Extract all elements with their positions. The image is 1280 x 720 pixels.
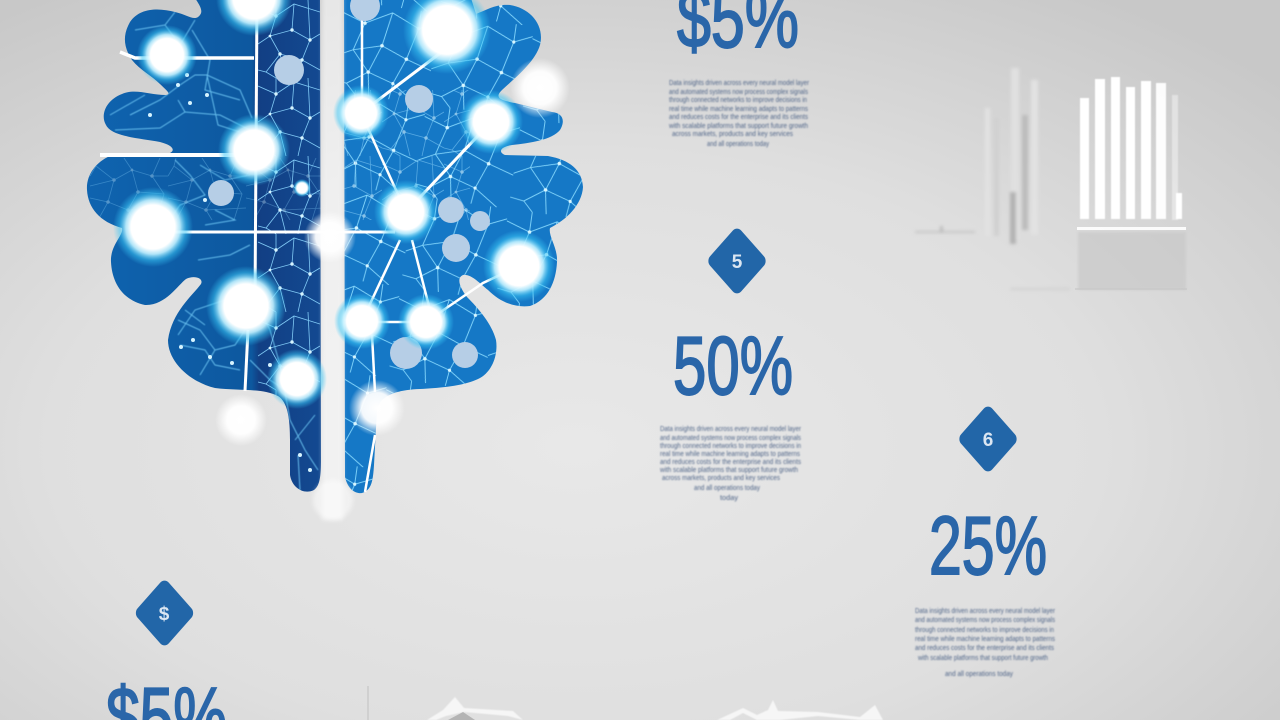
paragraph: and automated systems now process complex signals — [669, 89, 808, 96]
paragraph: across markets, products and key services — [672, 131, 793, 138]
paragraph — [659, 426, 802, 502]
reflection panel — [1078, 232, 1186, 290]
paragraph: with scalable platforms that support future growth — [659, 467, 798, 474]
paragraph: and all operations today — [707, 141, 769, 148]
big number: 25% — [929, 499, 1047, 592]
bars — [1080, 77, 1182, 220]
bar chart: faint ghost bars — [915, 68, 1070, 290]
paragraph: with scalable platforms that support future growth — [917, 655, 1048, 662]
paragraph: and reduces costs for the enterprise and its clients — [915, 645, 1054, 652]
paragraph: real time while machine learning adapts to patterns — [669, 106, 808, 113]
paragraph: real time while machine learning adapts to patterns — [915, 636, 1055, 643]
white mountain left — [427, 697, 523, 720]
right hemisphere — [340, 0, 590, 500]
paragraph: today — [720, 495, 739, 502]
paragraph: across markets, products and key services — [662, 475, 780, 482]
paragraph — [915, 608, 1056, 678]
white mountain right — [717, 700, 883, 720]
glowing nodes — [113, 0, 570, 520]
paragraph: through connected networks to improve decisions in — [669, 97, 807, 104]
big number: 50% — [673, 319, 793, 412]
centre glow strip — [322, 0, 343, 520]
paragraph: and automated systems now process complex signals — [915, 617, 1055, 624]
paragraph — [668, 80, 810, 148]
paragraph: Data insights driven across every neural model layer — [915, 608, 1056, 615]
paragraph: real time while machine learning adapts to patterns — [660, 451, 800, 458]
connector lines — [100, 0, 519, 492]
diamond icon: 6 — [983, 430, 993, 451]
diamond icon: 5 — [732, 252, 743, 273]
paragraph: through connected networks to improve decisions in — [915, 627, 1054, 634]
baseline — [1077, 227, 1186, 230]
brain illustration — [80, 0, 590, 520]
paragraph: and automated systems now process complex signals — [660, 435, 801, 442]
paragraph: and all operations today — [694, 485, 760, 492]
stat block: bottom left — [106, 578, 227, 720]
bottom chart fragments — [367, 686, 883, 720]
grey peak — [448, 712, 475, 720]
axis line — [367, 686, 369, 720]
paragraph: with scalable platforms that support future growth — [668, 123, 808, 130]
left hemisphere — [86, 0, 321, 492]
stat block: right — [915, 404, 1056, 678]
diamond icon: $ — [159, 604, 170, 625]
paragraph: and reduces costs for the enterprise and its clients — [669, 114, 808, 121]
axis ticks row — [1075, 288, 1187, 290]
diamond icon — [957, 404, 1019, 474]
diamond icon — [706, 226, 768, 296]
paragraph: and all operations today — [945, 671, 1013, 678]
diamond icon — [133, 578, 196, 648]
bar chart: white bars — [1075, 77, 1187, 290]
paragraph: and reduces costs for the enterprise and its clients — [660, 459, 801, 466]
flat pale circles — [208, 0, 490, 369]
stat block: centre — [659, 226, 802, 502]
paragraph: Data insights driven across every neural model layer — [669, 80, 810, 87]
paragraph: through connected networks to improve decisions in — [660, 443, 801, 450]
paragraph: Data insights driven across every neural model layer — [660, 426, 802, 433]
stat block: top centre — [668, 0, 810, 148]
